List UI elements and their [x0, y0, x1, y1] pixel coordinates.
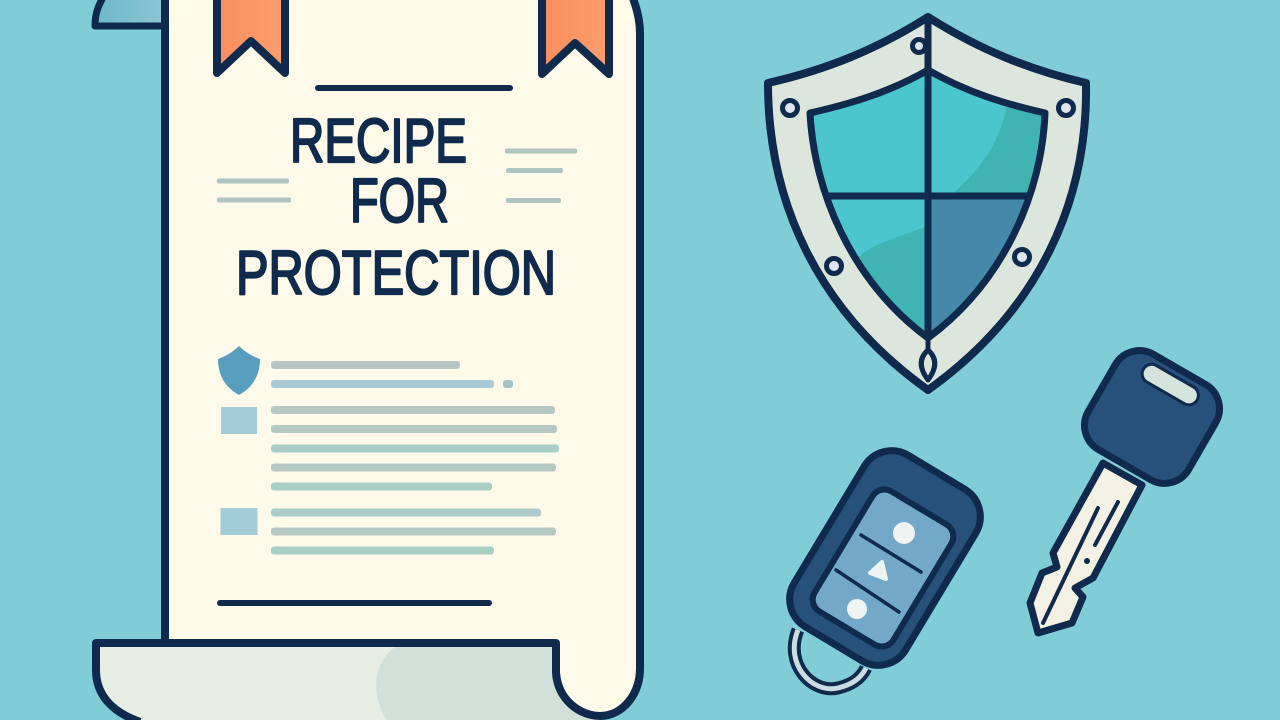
shield cross bars — [826, 17, 1030, 340]
title: FOR — [350, 167, 449, 236]
fob body — [778, 439, 992, 677]
second text block lines — [271, 406, 559, 490]
side text placeholder lines — [217, 148, 577, 203]
shield rivets — [782, 40, 1074, 274]
top rule — [315, 85, 513, 91]
shield inner panels — [810, 70, 1060, 346]
title: PROTECTION — [236, 239, 556, 308]
small blue shield icon — [218, 346, 260, 395]
shield outer frame — [768, 17, 1086, 390]
second square bullet — [220, 508, 258, 535]
icon: shield — [768, 17, 1086, 390]
icon: car key fob — [778, 439, 992, 689]
signature line — [217, 600, 492, 606]
key head slot — [1139, 361, 1202, 408]
fob screen — [808, 484, 958, 652]
panel: paper scroll — [95, 0, 640, 720]
shield bottom clasp — [921, 340, 935, 380]
key blade grooves — [1043, 502, 1118, 623]
first square bullet — [221, 407, 257, 434]
bottom scroll roll — [96, 643, 600, 720]
left orange ribbon — [217, 0, 285, 73]
top left scroll curl — [95, 0, 165, 26]
fob ring — [794, 630, 866, 689]
fob dividers — [836, 535, 921, 612]
scroll sheet — [165, 0, 640, 716]
first text block lines — [271, 361, 513, 388]
icon: car key — [1030, 340, 1230, 633]
fob buttons — [847, 522, 915, 619]
title: RECIPE — [290, 107, 467, 176]
key blade — [1030, 463, 1142, 633]
right orange ribbon — [542, 0, 609, 74]
title — [236, 107, 556, 308]
key head — [1074, 340, 1230, 494]
third text block lines — [271, 508, 556, 554]
